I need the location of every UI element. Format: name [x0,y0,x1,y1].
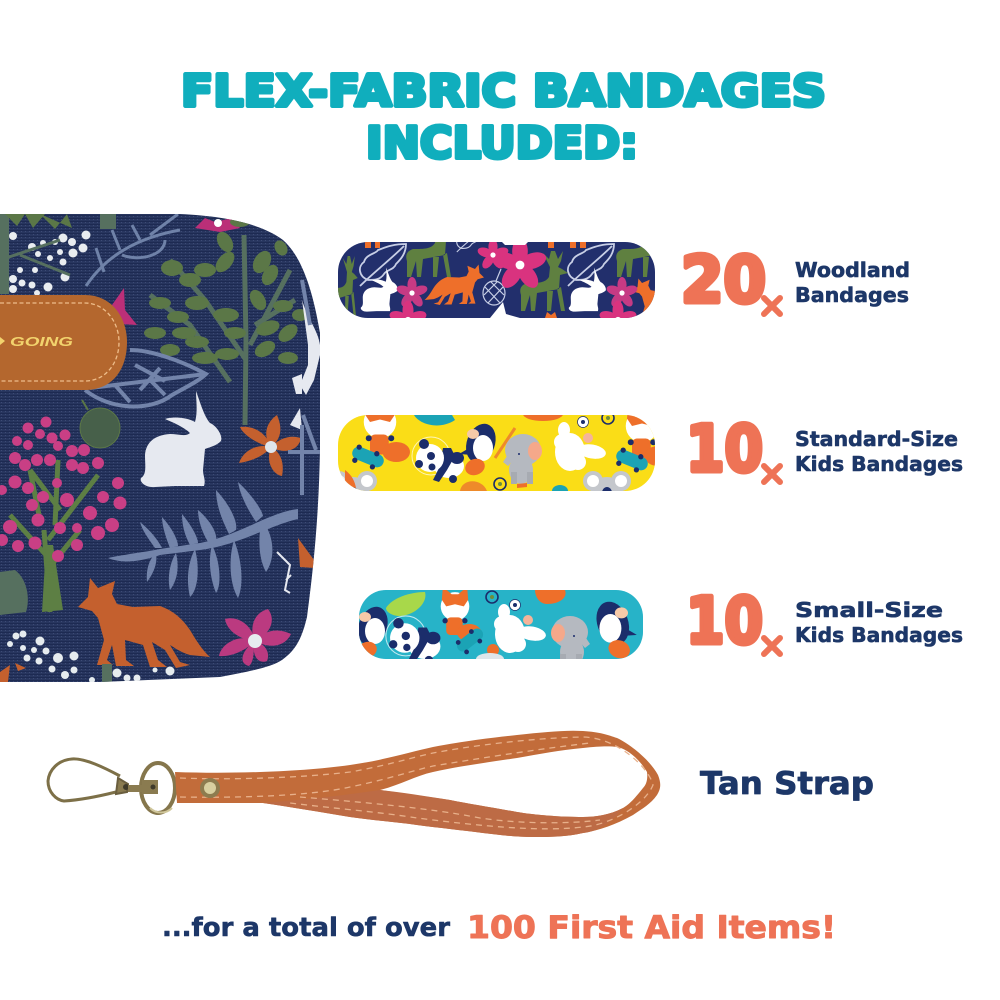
count: 20x: 20 [681,244,766,318]
icon: green acorn [80,400,120,448]
panel: yellow kids bandage [338,415,655,491]
strap lower band shading [263,790,623,837]
icon: multiply mark [764,298,780,314]
title: INCLUDED: [366,118,638,169]
strap leather [175,731,660,837]
icon: pink flower top [195,218,240,232]
icon: right edge white animal [290,300,320,430]
title: FLEX-FABRIC BANDAGES [181,66,826,117]
icon: rivet [200,778,220,798]
icon: bottom white berries [7,630,174,683]
icon: kids animals on yellow bandage [340,415,655,491]
pouch with woodland print [0,210,325,685]
icon: tan wrist strap with clasp [48,731,660,837]
icon: grey outlined leaf top [86,214,180,286]
label: woodland bandages: Bandages [795,283,909,307]
title [181,66,826,169]
label: woodland bandages [795,258,910,307]
label: standard-size kids bandages [795,427,963,476]
footer text: 100 First Aid Items! [467,910,836,946]
icon: orange flower [239,415,301,476]
icon: pink flower bottom [219,609,291,666]
icon: large grey leaf [85,350,206,406]
icon: metal clasp [48,759,175,813]
text: tag brand: GOING [10,334,73,349]
icon: orange fox [78,578,210,668]
footer text [162,910,836,946]
label: standard-size kids bandages: Kids Bandages [795,452,963,476]
count: 10x standard: 10 [686,413,763,487]
icon: green shrub [0,570,28,615]
footer text: ...for a total of over [162,913,450,943]
icon: kids animals on teal bandage [359,590,637,659]
icon: green tree top right [144,217,308,425]
label: small-size kids bandages: Kids Bandages [795,623,963,647]
icon: multiply mark [764,466,780,482]
panel: teal small kids bandage [359,590,643,659]
icon: white rabbit [141,391,221,487]
panel: woodland bandage [338,242,655,318]
label: woodland bandages: Woodland [795,258,910,282]
icon: top-left white berries [9,230,90,296]
label: small-size kids bandages [795,598,963,647]
icon: right edge grey leaf [288,280,320,495]
icon: multiply mark [764,638,780,654]
icon: woodland animals on bandage [338,242,655,318]
stitching [180,737,653,829]
icon: pink flower behind tag [112,288,137,325]
icon: grey fern [108,482,298,598]
count: 10x small: 10 [686,585,763,659]
icon: right edge orange and white detail [298,538,315,568]
panel: tan leather tag [0,295,127,390]
label: standard-size kids bandages: Standard-Size [795,427,958,451]
label: tan strap: Tan Strap [700,766,874,802]
label: small-size kids bandages: Small-Size [795,598,943,622]
icon: pink berry tree [0,416,126,612]
